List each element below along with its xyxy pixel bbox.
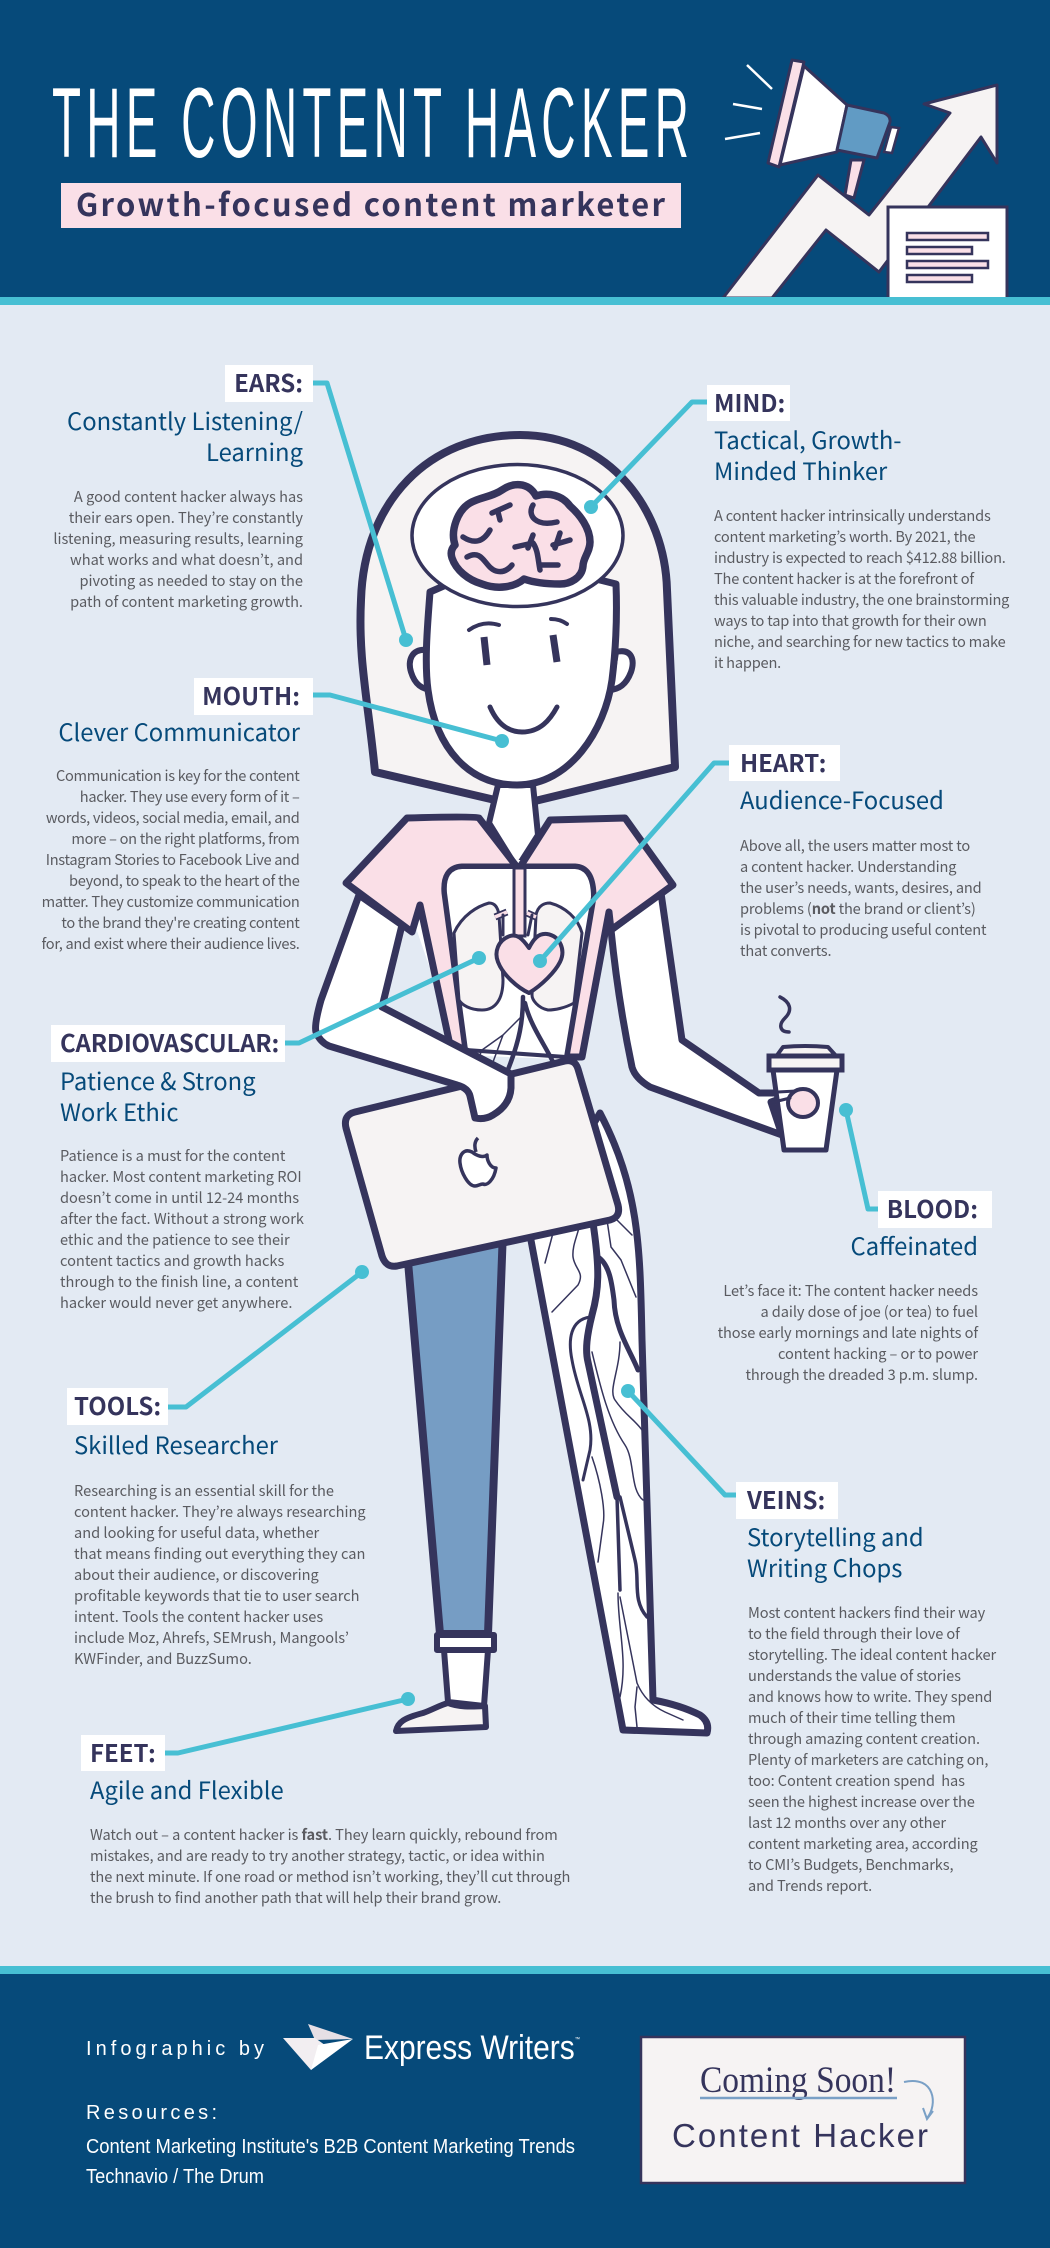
right arm bbox=[611, 893, 796, 1135]
panel: tools bbox=[67, 1387, 366, 1669]
face bbox=[426, 570, 617, 785]
panel: tools: include Moz, Ahrefs, SEMrush, Mangools’ bbox=[74, 1627, 349, 1648]
icon: growth arrow bbox=[723, 85, 997, 298]
panel: tools: KWFinder, and BuzzSumo. bbox=[74, 1648, 252, 1669]
panel: veins: seen the highest increase over the bbox=[748, 1791, 975, 1812]
panel: mind: ways to tap into that growth for their own bbox=[714, 610, 987, 631]
panel: veins: content marketing area, according bbox=[748, 1833, 979, 1854]
panel: mind: Tactical, Growth- bbox=[714, 421, 902, 456]
panel: blood: through the dreaded 3 p.m. slump. bbox=[745, 1364, 978, 1385]
panel: veins: through amazing content creation. bbox=[748, 1728, 980, 1749]
connector: mind bbox=[584, 402, 707, 514]
panel: ears: EARS: bbox=[234, 364, 303, 399]
panel: feet: Watch out – a content hacker is fast. They learn quickly, rebound from bbox=[90, 1824, 558, 1845]
character illustration bbox=[316, 435, 842, 1733]
connector: tools bbox=[168, 1265, 369, 1407]
neck bbox=[489, 785, 538, 868]
panel: ears: their ears open. They’re constantly bbox=[69, 507, 303, 528]
panel: heart: problems (not the brand or client’s) bbox=[740, 898, 976, 919]
panel: heart: the user’s needs, wants, desires, and bbox=[740, 877, 982, 898]
panel: cardiovascular: CARDIOVASCULAR: bbox=[60, 1024, 279, 1059]
panel: veins: Most content hackers find their way bbox=[748, 1602, 985, 1623]
shirt left bbox=[346, 817, 517, 1050]
panel: feet: mistakes, and are ready to try another strategy, tactic, or idea within bbox=[90, 1845, 545, 1866]
left leg in jeans bbox=[396, 1230, 503, 1731]
panel: mouth: Instagram Stories to Facebook Live and bbox=[46, 849, 300, 870]
left arm holding laptop bbox=[316, 895, 511, 1119]
coming soon card bbox=[641, 2037, 965, 2183]
panel: veins: VEINS: bbox=[746, 1481, 825, 1516]
panel: feet bbox=[81, 1734, 570, 1908]
arrow bbox=[904, 2081, 933, 2119]
logo wordmark: Express Writers bbox=[364, 2029, 603, 2067]
connector: mouth bbox=[313, 695, 509, 748]
panel: veins: to CMI’s Budgets, Benchmarks, bbox=[748, 1854, 953, 1875]
panel: cardiovascular: through to the finish line, a content bbox=[60, 1271, 299, 1292]
icon: apple logo bbox=[460, 1138, 496, 1186]
panel: mind: niche, and searching for new tactics to make bbox=[714, 631, 1006, 652]
panel: ears: A good content hacker always has bbox=[74, 486, 303, 507]
coffee cup bbox=[759, 997, 842, 1150]
laptop bbox=[345, 1061, 619, 1266]
brain cap bbox=[412, 464, 623, 606]
panel: mouth: Communication is key for the content bbox=[56, 765, 300, 786]
heart bbox=[496, 934, 562, 993]
panel: ears: what works and what doesn’t, and bbox=[70, 549, 303, 570]
resources list: Technavio / The Drum bbox=[86, 2166, 264, 2188]
ears bbox=[410, 650, 633, 690]
panel: cardiovascular: Work Ethic bbox=[60, 1093, 178, 1128]
panel: ears: path of content marketing growth. bbox=[70, 591, 303, 612]
resources list: Content Marketing Institute's B2B Content Marketing Trends bbox=[86, 2136, 575, 2158]
panel: veins: storytelling. The ideal content hacker bbox=[748, 1644, 996, 1665]
panel: ears: Constantly Listening/ bbox=[67, 402, 303, 437]
panel: blood: a daily dose of joe (or tea) to fuel bbox=[760, 1301, 978, 1322]
connector: heart bbox=[533, 763, 729, 968]
panel: mouth: words, videos, social media, email, and bbox=[46, 807, 300, 828]
panel: heart: Above all, the users matter most to bbox=[740, 835, 970, 856]
panel: cardiovascular: after the fact. Without a strong work bbox=[60, 1208, 304, 1229]
hair bbox=[360, 435, 675, 801]
panel: cardiovascular bbox=[51, 1024, 304, 1313]
title: THE CONTENT HACKER bbox=[52, 69, 689, 179]
connector: ears bbox=[313, 383, 413, 647]
resources list bbox=[86, 2136, 575, 2188]
subtitle banner: Growth-focused content marketer bbox=[76, 180, 665, 225]
panel: blood: Caffeinated bbox=[851, 1227, 978, 1262]
panel: heart: that converts. bbox=[740, 940, 831, 961]
panel: veins: understands the value of stories bbox=[748, 1665, 961, 1686]
panel: blood: BLOOD: bbox=[887, 1190, 978, 1225]
panel: veins: and knows how to write. They spend bbox=[748, 1686, 992, 1707]
panel: veins: Storytelling and bbox=[747, 1518, 924, 1553]
connector: veins bbox=[621, 1384, 736, 1495]
icon: document bbox=[888, 207, 1007, 299]
shirt right bbox=[520, 818, 673, 1057]
panel: blood: content hacking – or to power bbox=[778, 1343, 978, 1364]
panel: mind: this valuable industry, the one brainstorming bbox=[714, 589, 1010, 610]
panel: mind bbox=[707, 384, 1010, 673]
panel: ears: pivoting as needed to stay on the bbox=[79, 570, 303, 591]
panel: cardiovascular: hacker would never get anywhere. bbox=[60, 1292, 292, 1313]
panel: blood: those early mornings and late nights of bbox=[718, 1322, 979, 1343]
panel: tools: and looking for useful data, whether bbox=[74, 1522, 320, 1543]
panel: tools: Skilled Researcher bbox=[74, 1426, 279, 1461]
panel: veins: Plenty of marketers are catching on, bbox=[748, 1749, 988, 1770]
panel: cardiovascular: doesn’t come in until 12-24 months bbox=[60, 1187, 299, 1208]
panel: ears: listening, measuring results, learning bbox=[53, 528, 304, 549]
panel: cardiovascular: content tactics and growth hacks bbox=[60, 1250, 284, 1271]
chest and organs bbox=[346, 817, 673, 1072]
icon: megaphone bbox=[725, 60, 899, 198]
panel: veins: and Trends report. bbox=[748, 1875, 872, 1896]
icon: express writers logo bbox=[283, 2024, 353, 2070]
panel: mouth: Clever Communicator bbox=[58, 713, 301, 748]
panel: heart: is pivotal to producing useful content bbox=[740, 919, 987, 940]
panel: ears bbox=[53, 364, 313, 612]
resources heading: Resources: bbox=[86, 2102, 217, 2124]
panel: veins: Writing Chops bbox=[747, 1549, 902, 1584]
panel: mouth: more – on the right platforms, from bbox=[71, 828, 300, 849]
panel: mind: content marketing’s worth. By 2021, the bbox=[714, 526, 976, 547]
panel: cardiovascular: Patience & Strong bbox=[60, 1062, 256, 1097]
panel: tools: TOOLS: bbox=[74, 1387, 161, 1422]
infographic credit: Infographic by bbox=[86, 2038, 264, 2060]
right leg with veins bbox=[530, 1113, 708, 1733]
panel: cardiovascular: hacker. Most content marketing ROI bbox=[60, 1166, 302, 1187]
panel: veins: to the field through their love of bbox=[748, 1623, 961, 1644]
panel: tools: profitable keywords that tie to user search bbox=[74, 1585, 360, 1606]
panel: mouth: to the brand they're creating content bbox=[61, 912, 300, 933]
panel: cardiovascular: Patience is a must for the content bbox=[60, 1145, 285, 1166]
panel: tools: content hacker. They’re always researching bbox=[74, 1501, 366, 1522]
panel: mind: The content hacker is at the forefront of bbox=[714, 568, 975, 589]
panel: mouth: for, and exist where their audience lives. bbox=[42, 933, 300, 954]
panel: ears: Learning bbox=[206, 433, 304, 468]
panel: heart: a content hacker. Understanding bbox=[740, 856, 957, 877]
panel: mouth: beyond, to speak to the heart of the bbox=[69, 870, 300, 891]
panel: feet: the brush to find another path that will help their brand grow. bbox=[90, 1887, 501, 1908]
panel: cardiovascular: ethic and the patience to see their bbox=[60, 1229, 290, 1250]
panel: veins bbox=[736, 1481, 996, 1896]
footer banner bbox=[0, 1966, 1050, 2248]
panel: heart: HEART: bbox=[740, 744, 826, 779]
coming soon card: Coming Soon! bbox=[700, 2060, 896, 2101]
panel: heart bbox=[729, 744, 987, 961]
logo wordmark: ™ bbox=[575, 2036, 580, 2043]
connector: cardiovascular bbox=[285, 951, 486, 1043]
panel: mouth: hacker. They use every form of it – bbox=[80, 786, 300, 807]
coming soon card: Content Hacker bbox=[672, 2117, 928, 2154]
panel: mind: MIND: bbox=[714, 384, 785, 419]
panel: feet: Agile and Flexible bbox=[90, 1771, 284, 1806]
panel: mind: it happen. bbox=[714, 652, 781, 673]
panel: blood: Let’s face it: The content hacker needs bbox=[723, 1280, 978, 1301]
panel: tools: that means finding out everything they can bbox=[74, 1543, 365, 1564]
panel: mind: Minded Thinker bbox=[714, 452, 888, 487]
brain bbox=[451, 485, 590, 587]
panel: tools: Researching is an essential skill for the bbox=[74, 1480, 334, 1501]
panel: mind: industry is expected to reach $412.88 billion. bbox=[714, 547, 1006, 568]
connector: feet bbox=[165, 1692, 415, 1753]
panel: tools: about their audience, or discovering bbox=[74, 1564, 319, 1585]
connector: blood bbox=[839, 1103, 878, 1209]
panel: mouth bbox=[42, 677, 313, 954]
panel: blood bbox=[718, 1190, 992, 1385]
header banner bbox=[0, 0, 1050, 305]
panel: veins: last 12 months over any other bbox=[748, 1812, 946, 1833]
panel: mouth: matter. They customize communication bbox=[42, 891, 300, 912]
panel: mind: A content hacker intrinsically understands bbox=[714, 505, 991, 526]
panel: veins: much of their time telling them bbox=[748, 1707, 956, 1728]
panel: tools: intent. Tools the content hacker uses bbox=[74, 1606, 323, 1627]
panel: feet: the next minute. If one road or method isn’t working, they’ll cut through bbox=[90, 1866, 570, 1887]
panel: feet: FEET: bbox=[90, 1734, 156, 1769]
panel: veins: too: Content creation spend has bbox=[748, 1770, 965, 1791]
panel: mouth: MOUTH: bbox=[202, 677, 300, 712]
panel: heart: Audience-Focused bbox=[740, 781, 944, 816]
